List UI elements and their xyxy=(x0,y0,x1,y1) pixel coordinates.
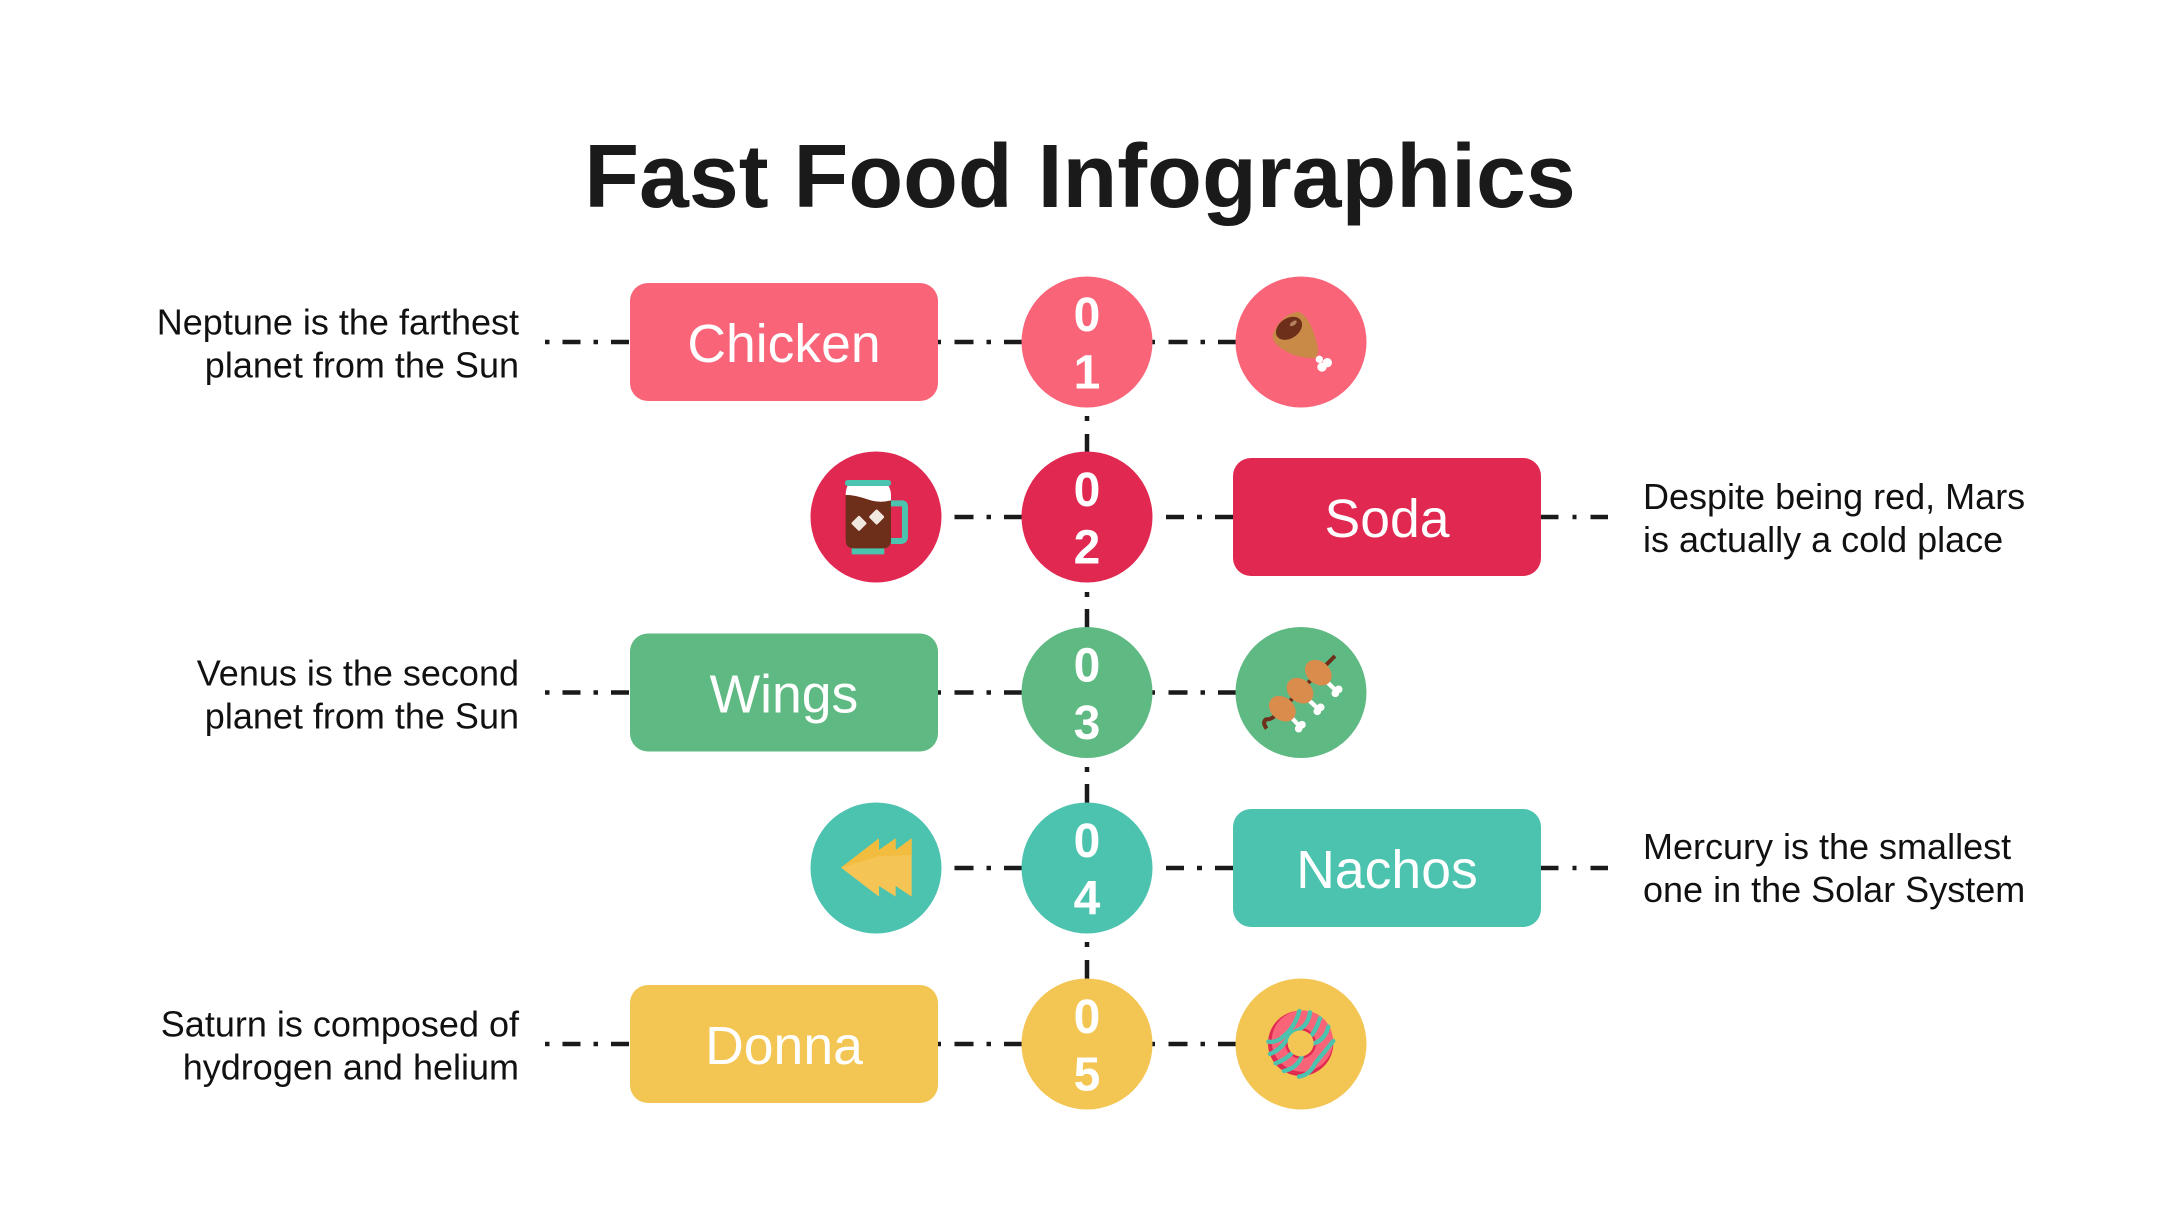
number 02 xyxy=(1022,452,1152,582)
description 03: planet from the Sun xyxy=(205,696,519,736)
icon: chicken skewer xyxy=(1236,627,1366,758)
description 02: is actually a cold place xyxy=(1643,519,2003,560)
label box: Donna: Donna xyxy=(705,1017,863,1076)
number 02: 2 xyxy=(1074,522,1100,574)
icon: donut xyxy=(1236,978,1366,1110)
row 04: nachos xyxy=(810,802,2025,934)
label box: Chicken: Chicken xyxy=(687,315,881,374)
description 01: Neptune is the farthest xyxy=(157,302,519,342)
connectors 04 xyxy=(954,866,1608,870)
number 04: 4 xyxy=(1074,872,1101,926)
number 03: 3 xyxy=(1074,697,1100,750)
number 04 xyxy=(1022,802,1152,934)
connectors 03 xyxy=(545,690,1236,695)
vertical connectors xyxy=(1085,416,1089,979)
number 05: 0 xyxy=(1074,991,1100,1044)
icon: nachos xyxy=(810,802,942,934)
number 01 xyxy=(1022,276,1152,408)
row 02: soda xyxy=(810,452,2025,582)
row 01: chicken xyxy=(157,276,1366,408)
title: Fast Food Infographics xyxy=(584,127,1576,227)
label box: Soda xyxy=(1233,458,1541,576)
description 05: hydrogen and helium xyxy=(183,1046,519,1088)
connectors 05 xyxy=(545,1042,1236,1046)
number 03: 0 xyxy=(1074,640,1100,692)
label box: Nachos xyxy=(1233,809,1541,927)
label box: Chicken xyxy=(630,283,938,401)
number 04: 0 xyxy=(1074,815,1100,868)
label box: Wings: Wings xyxy=(710,666,858,724)
description 04: one in the Solar System xyxy=(1643,869,2025,910)
row 03: wings xyxy=(197,627,1366,758)
label box: Nachos: Nachos xyxy=(1296,841,1478,900)
number 05 xyxy=(1022,978,1152,1110)
row 05: donna xyxy=(161,978,1366,1110)
description 05: Saturn is composed of xyxy=(161,1004,520,1044)
label box: Wings xyxy=(630,634,938,752)
connectors 01 xyxy=(545,340,1236,344)
description 04: Mercury is the smallest xyxy=(1643,826,2011,867)
number 01: 1 xyxy=(1074,346,1100,400)
number 05: 5 xyxy=(1074,1048,1100,1102)
number 02: 0 xyxy=(1074,464,1100,517)
description 02: Despite being red, Mars xyxy=(1643,476,2025,517)
label box: Soda: Soda xyxy=(1325,490,1450,549)
number 01: 0 xyxy=(1074,289,1100,342)
description 01: planet from the Sun xyxy=(205,344,519,386)
label box: Donna xyxy=(630,985,938,1103)
number 03 xyxy=(1022,627,1152,758)
icon: soda mug xyxy=(810,452,942,582)
connectors 02 xyxy=(954,515,1608,519)
icon: chicken drumstick xyxy=(1236,276,1366,408)
description 03: Venus is the second xyxy=(197,652,519,694)
